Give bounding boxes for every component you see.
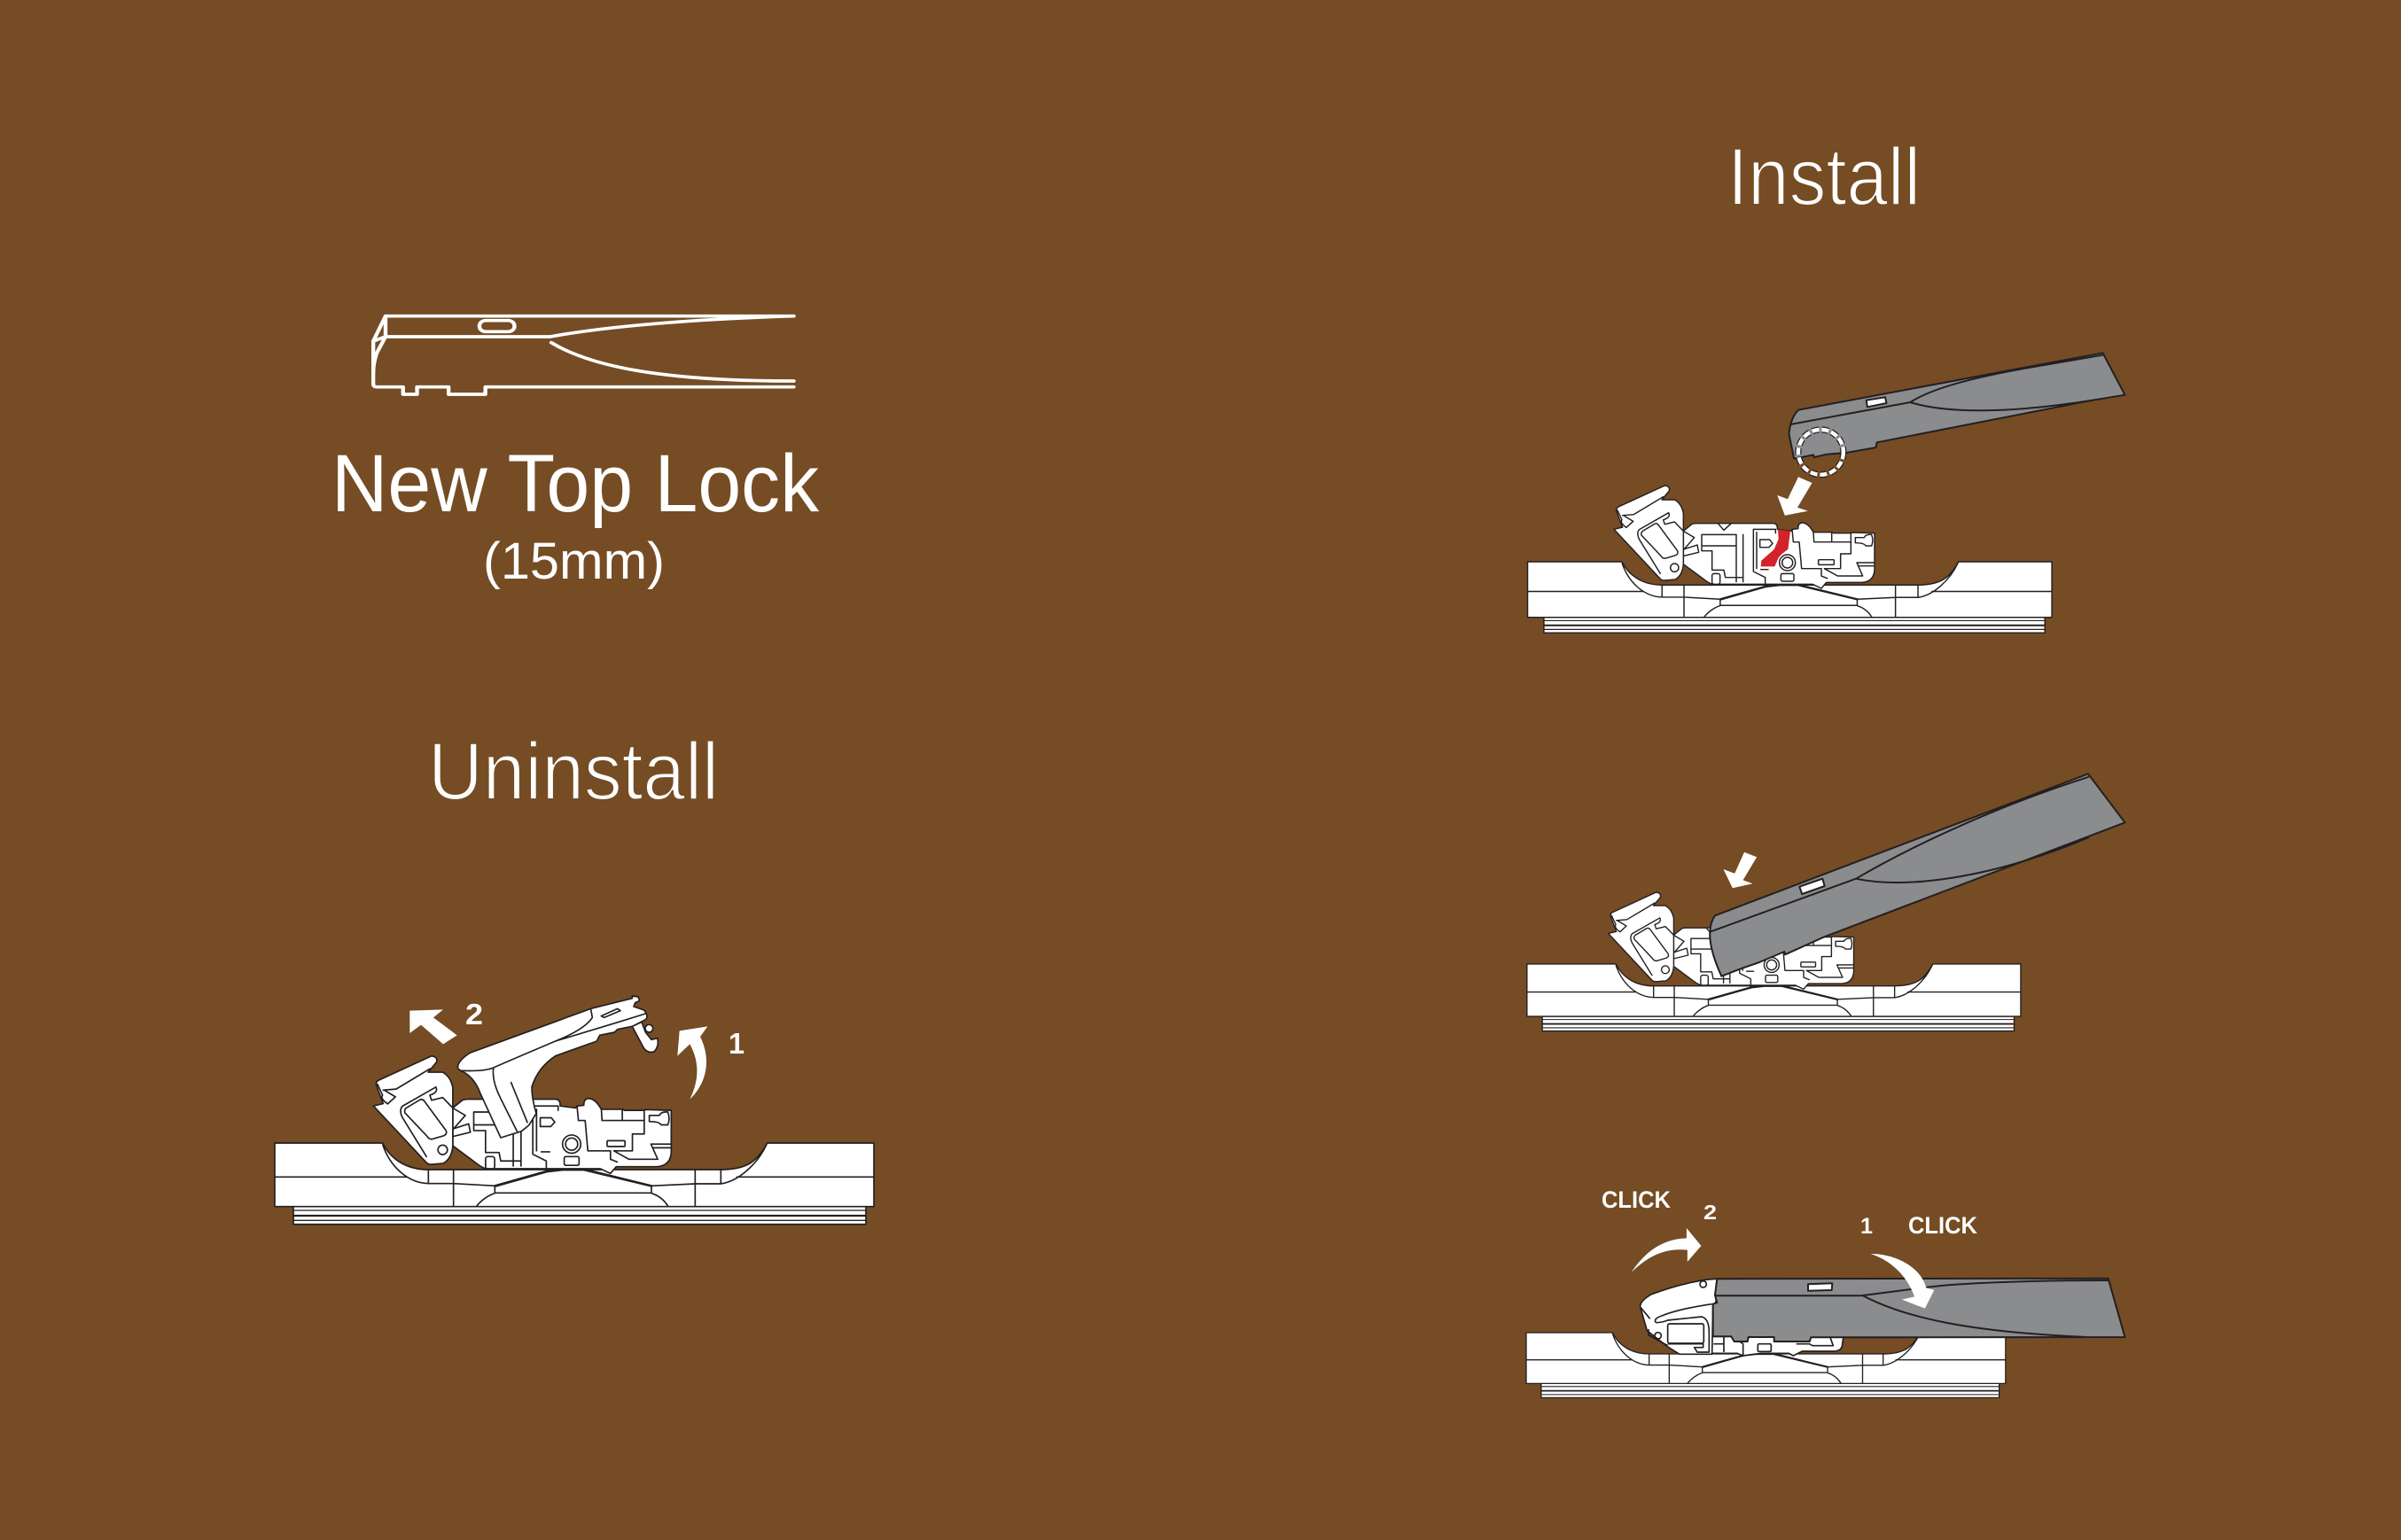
title: New Top Lock: New Top Lock <box>331 439 820 529</box>
arrow pointing to clip <box>1777 477 1812 516</box>
clip on blade base <box>1527 892 2021 1031</box>
icon: new top lock blade tip outline <box>373 316 794 394</box>
label 2: 2 <box>1703 1201 1717 1224</box>
label 2: 2 <box>465 998 483 1031</box>
arrow 1 curved up <box>677 1026 707 1100</box>
arrow 2 pull up-left <box>409 1009 457 1044</box>
subtitle: 15mm: (15mm) <box>483 533 665 590</box>
arrow pressing arm down <box>1723 852 1757 888</box>
clip on blade base with red target area <box>1528 486 2052 633</box>
heading: Uninstall: Uninstall <box>428 727 719 817</box>
blade base <box>1526 1333 2006 1397</box>
arrow 1 curved down <box>1871 1254 1934 1309</box>
heading: Install: Install <box>1727 132 1921 222</box>
label 1: 1 <box>729 1027 744 1060</box>
grey wiper arm lowered onto clip <box>1710 774 2125 976</box>
closed head <box>1641 1279 1717 1354</box>
dashed circle callout <box>1798 430 1844 475</box>
panel: install step 1 <box>1528 353 2125 633</box>
label 1: 1 <box>1860 1214 1873 1239</box>
closed clip details under arm <box>1641 1279 1844 1356</box>
arrow 2 curved over head <box>1632 1228 1701 1272</box>
label CLICK right: CLICK <box>1908 1212 1977 1239</box>
label CLICK left: CLICK <box>1602 1186 1671 1213</box>
wiper clip on blade base with raised lever <box>275 996 874 1225</box>
grey wiper arm closed <box>1713 1279 2125 1342</box>
grey wiper arm angled above <box>1789 353 2125 459</box>
panel: install step 2 <box>1527 774 2125 1031</box>
panel: uninstall diagram <box>275 996 874 1225</box>
panel: install step 3 <box>1526 1186 2125 1397</box>
